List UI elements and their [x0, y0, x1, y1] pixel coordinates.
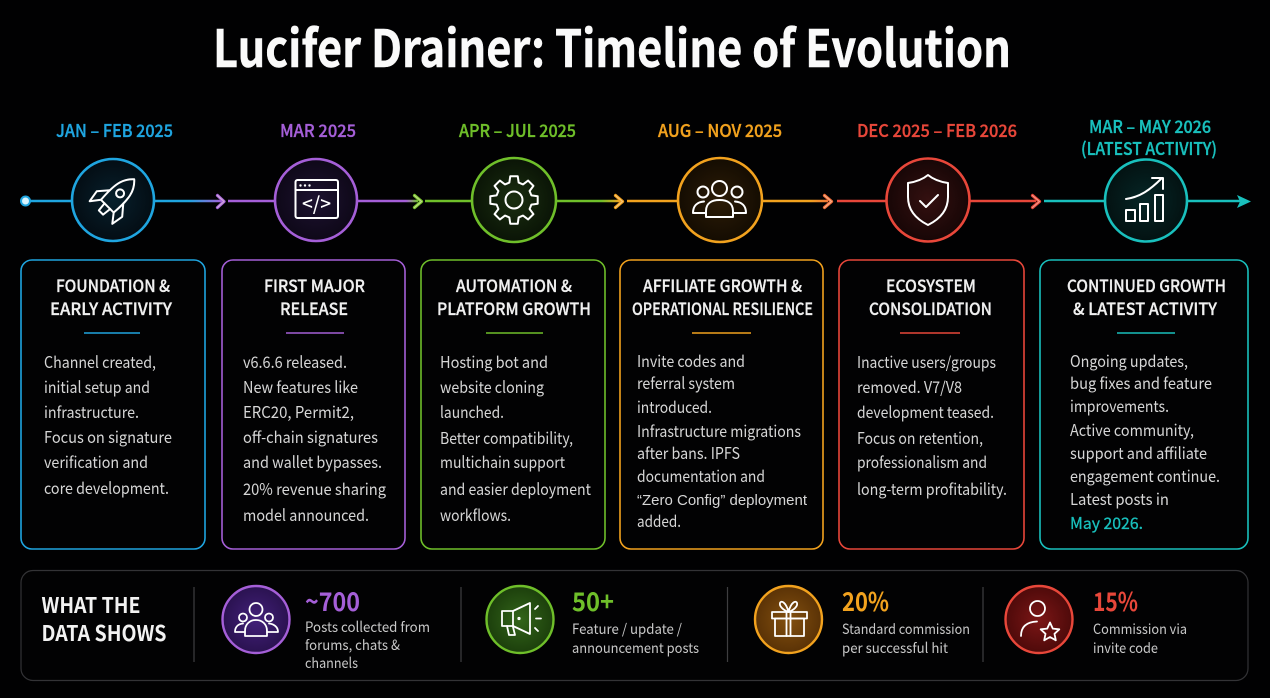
body text: infrastructure. — [44, 399, 139, 423]
body text: documentation and — [637, 463, 765, 487]
heading: FIRST MAJOR — [264, 272, 365, 297]
date labels: APR – JUL 2025 — [459, 118, 576, 143]
stat: feature posts: announcement posts — [572, 638, 699, 658]
heading: OPERATIONAL RESILIENCE — [632, 295, 813, 320]
panel heading — [42, 589, 166, 648]
body text: development teased. — [857, 399, 994, 423]
body text: professionalism and — [857, 449, 987, 473]
stat: invite commission: 15% — [1093, 582, 1138, 619]
body text: Invite codes and — [637, 348, 745, 372]
heading — [1067, 272, 1226, 320]
body text: workflows. — [440, 502, 511, 526]
body text: Latest posts in — [1070, 486, 1169, 510]
heading — [632, 272, 813, 320]
panel: continued growth — [1040, 260, 1248, 549]
heading — [264, 272, 365, 320]
body text: bug fixes and feature — [1070, 370, 1212, 394]
icon: code window: </> — [302, 190, 331, 216]
stat: posts: channels — [305, 653, 358, 673]
body text: off-chain signatures — [243, 424, 378, 448]
icon: growth chart — [1105, 160, 1187, 242]
stat: standard commission: Standard commission — [842, 619, 970, 639]
date labels: MAR – MAY 2026 — [1089, 114, 1211, 139]
date labels: JAN – FEB 2025 — [56, 118, 173, 143]
timeline line — [25, 200, 1240, 202]
body text: initial setup and — [44, 374, 150, 398]
body text: Focus on signature — [44, 424, 172, 448]
body text — [44, 349, 172, 499]
body text: and easier deployment — [440, 476, 591, 500]
body text: Infrastructure migrations — [637, 418, 801, 442]
icon: gear — [472, 158, 556, 242]
heading: AFFILIATE GROWTH & — [643, 272, 802, 297]
body text: added. — [637, 508, 681, 532]
body text: website cloning — [440, 374, 544, 398]
body text: and wallet bypasses. — [243, 449, 382, 473]
panel: affiliate growth — [620, 260, 823, 549]
body text — [243, 349, 386, 526]
panel: what the data shows — [21, 570, 1248, 680]
icon: code window — [275, 159, 357, 241]
body text: Channel created, — [44, 349, 156, 373]
stat: posts: forums, chats & — [305, 635, 400, 655]
body text: Ongoing updates, — [1070, 348, 1188, 372]
body text: “Zero Config” deployment — [637, 492, 808, 509]
body text: 20% revenue sharing — [243, 476, 386, 500]
body text: launched. — [440, 399, 504, 423]
body text: multichain support — [440, 449, 565, 473]
body text: May 2026. — [1070, 510, 1143, 534]
stat: standard commission — [755, 582, 970, 658]
chevron arrow 3 — [616, 196, 622, 208]
body text: Hosting bot and — [440, 349, 548, 373]
panel: ecosystem consolidation — [839, 260, 1024, 549]
body text: long-term profitability. — [857, 476, 1007, 500]
icon: team — [678, 158, 762, 242]
heading: CONSOLIDATION — [869, 295, 992, 320]
body text: verification and — [44, 449, 148, 473]
stat: posts — [222, 582, 430, 673]
stat: posts: Posts collected from — [305, 617, 430, 637]
body text — [637, 348, 808, 532]
date labels: MAR 2025 — [280, 118, 356, 143]
body text: engagement continue. — [1070, 463, 1220, 487]
body text: referral system — [637, 370, 735, 394]
icon: rocket — [72, 159, 154, 241]
panel: automation — [421, 260, 605, 549]
icon: shield — [886, 158, 970, 242]
panel heading: DATA SHOWS — [42, 617, 166, 648]
stat: invite commission: invite code — [1093, 638, 1158, 658]
panel: first major release — [222, 260, 405, 549]
heading — [50, 272, 173, 320]
heading: CONTINUED GROWTH — [1067, 272, 1226, 297]
body text: core development. — [44, 475, 169, 499]
stat: standard commission: per successful hit — [842, 638, 949, 658]
body text: Better compatibility, — [440, 425, 573, 449]
panel heading: WHAT THE — [42, 589, 140, 620]
body text: Focus on retention, — [857, 425, 983, 449]
stat: standard commission: 20% — [842, 582, 889, 619]
title: Lucifer Drainer: Timeline of Evolution — [213, 8, 1011, 82]
body text: model announced. — [243, 502, 369, 526]
stat: feature posts — [486, 582, 699, 658]
heading — [869, 272, 992, 320]
chevron arrow 4 — [824, 196, 832, 208]
heading: FOUNDATION & — [56, 272, 170, 297]
chevron arrow 2 — [414, 196, 422, 208]
body text — [440, 349, 591, 526]
heading: PLATFORM GROWTH — [437, 295, 591, 320]
date labels: AUG – NOV 2025 — [658, 118, 782, 143]
heading: AUTOMATION & — [456, 272, 572, 297]
stat: posts: ~700 — [305, 582, 360, 619]
end arrow — [1237, 195, 1251, 208]
stat: feature posts: Feature / update / — [572, 619, 682, 639]
timeline start dot — [21, 196, 30, 206]
heading: EARLY ACTIVITY — [50, 295, 173, 320]
body text — [1070, 348, 1220, 534]
body text: v6.6.6 released. — [243, 349, 347, 373]
date labels — [56, 114, 1217, 161]
body text: after bans. IPFS — [637, 440, 740, 464]
body text: introduced. — [637, 394, 712, 418]
heading: RELEASE — [280, 295, 348, 320]
chevron arrow 1 — [218, 196, 224, 208]
stat: feature posts: 50+ — [572, 582, 614, 619]
body text: New features like — [243, 374, 358, 398]
date labels: (LATEST ACTIVITY) — [1081, 136, 1217, 161]
body text: ERC20, Permit2, — [243, 399, 354, 423]
heading — [437, 272, 591, 320]
body text: removed. V7/V8 — [857, 374, 962, 398]
heading: ECOSYSTEM — [886, 272, 976, 297]
body text: Active community, — [1070, 417, 1194, 441]
heading: & LATEST ACTIVITY — [1073, 295, 1218, 320]
stat: invite commission — [1006, 582, 1187, 658]
chevron arrow 5 — [1032, 196, 1040, 208]
body text: improvements. — [1070, 393, 1169, 417]
body text: Inactive users/groups — [857, 349, 996, 373]
stat: invite commission: Commission via — [1093, 619, 1187, 639]
panel: foundation — [21, 260, 205, 549]
body text: support and affiliate — [1070, 440, 1207, 464]
body text — [857, 349, 1007, 500]
date labels: DEC 2025 – FEB 2026 — [857, 118, 1017, 143]
